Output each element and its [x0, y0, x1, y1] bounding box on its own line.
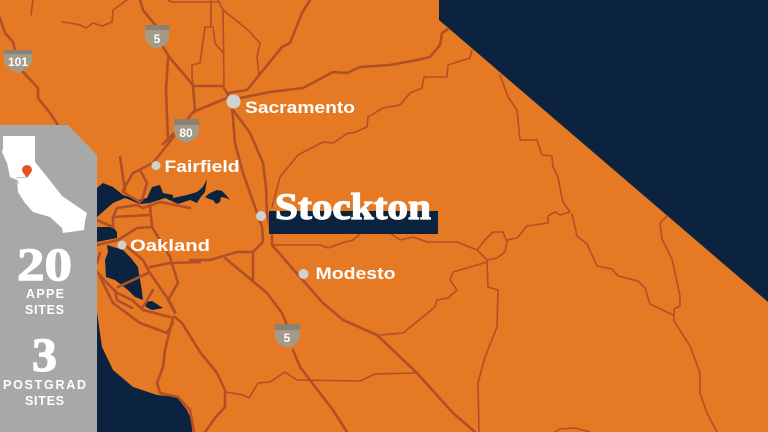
stat: 3 postgrad sites: 3	[32, 329, 57, 382]
interstate shield: 101	[4, 50, 32, 73]
major highways	[0, 0, 475, 432]
city marker and label: Oakland: Oakland	[130, 236, 210, 255]
side panel with site counts	[0, 125, 97, 432]
interstate shield: 5 south	[275, 324, 300, 348]
city marker and label: Sacramento: Sacramento	[245, 98, 355, 117]
interstate shield: 5 south: 5	[284, 331, 291, 345]
highlighted city: Stockton	[256, 187, 438, 234]
stat: 3 postgrad sites: POSTGRAD	[3, 378, 86, 392]
stat: 3 postgrad sites	[3, 329, 86, 408]
interstate shield: 80	[174, 119, 199, 143]
interstate shield: 5 north: 5	[154, 32, 161, 46]
California silhouette	[2, 136, 87, 233]
interstate shield: 5 north	[145, 25, 169, 49]
city marker and label: Fairfield: Fairfield	[164, 157, 240, 176]
stat: 20 APPE sites: 20	[17, 239, 72, 291]
stat: 20 APPE sites: APPE	[26, 287, 64, 301]
city marker and label: Modesto: Modesto	[316, 264, 396, 283]
stat: 20 APPE sites	[17, 239, 72, 317]
stat: 3 postgrad sites: SITES	[25, 394, 64, 408]
stat: 20 APPE sites: SITES	[25, 303, 64, 317]
interstate shield: 80: 80	[179, 126, 193, 140]
highlighted city: Stockton: Stockton	[275, 187, 431, 228]
city marker and label: Sacramento	[226, 94, 355, 117]
interstate shield: 101: 101	[8, 55, 28, 69]
location pin	[22, 165, 32, 178]
